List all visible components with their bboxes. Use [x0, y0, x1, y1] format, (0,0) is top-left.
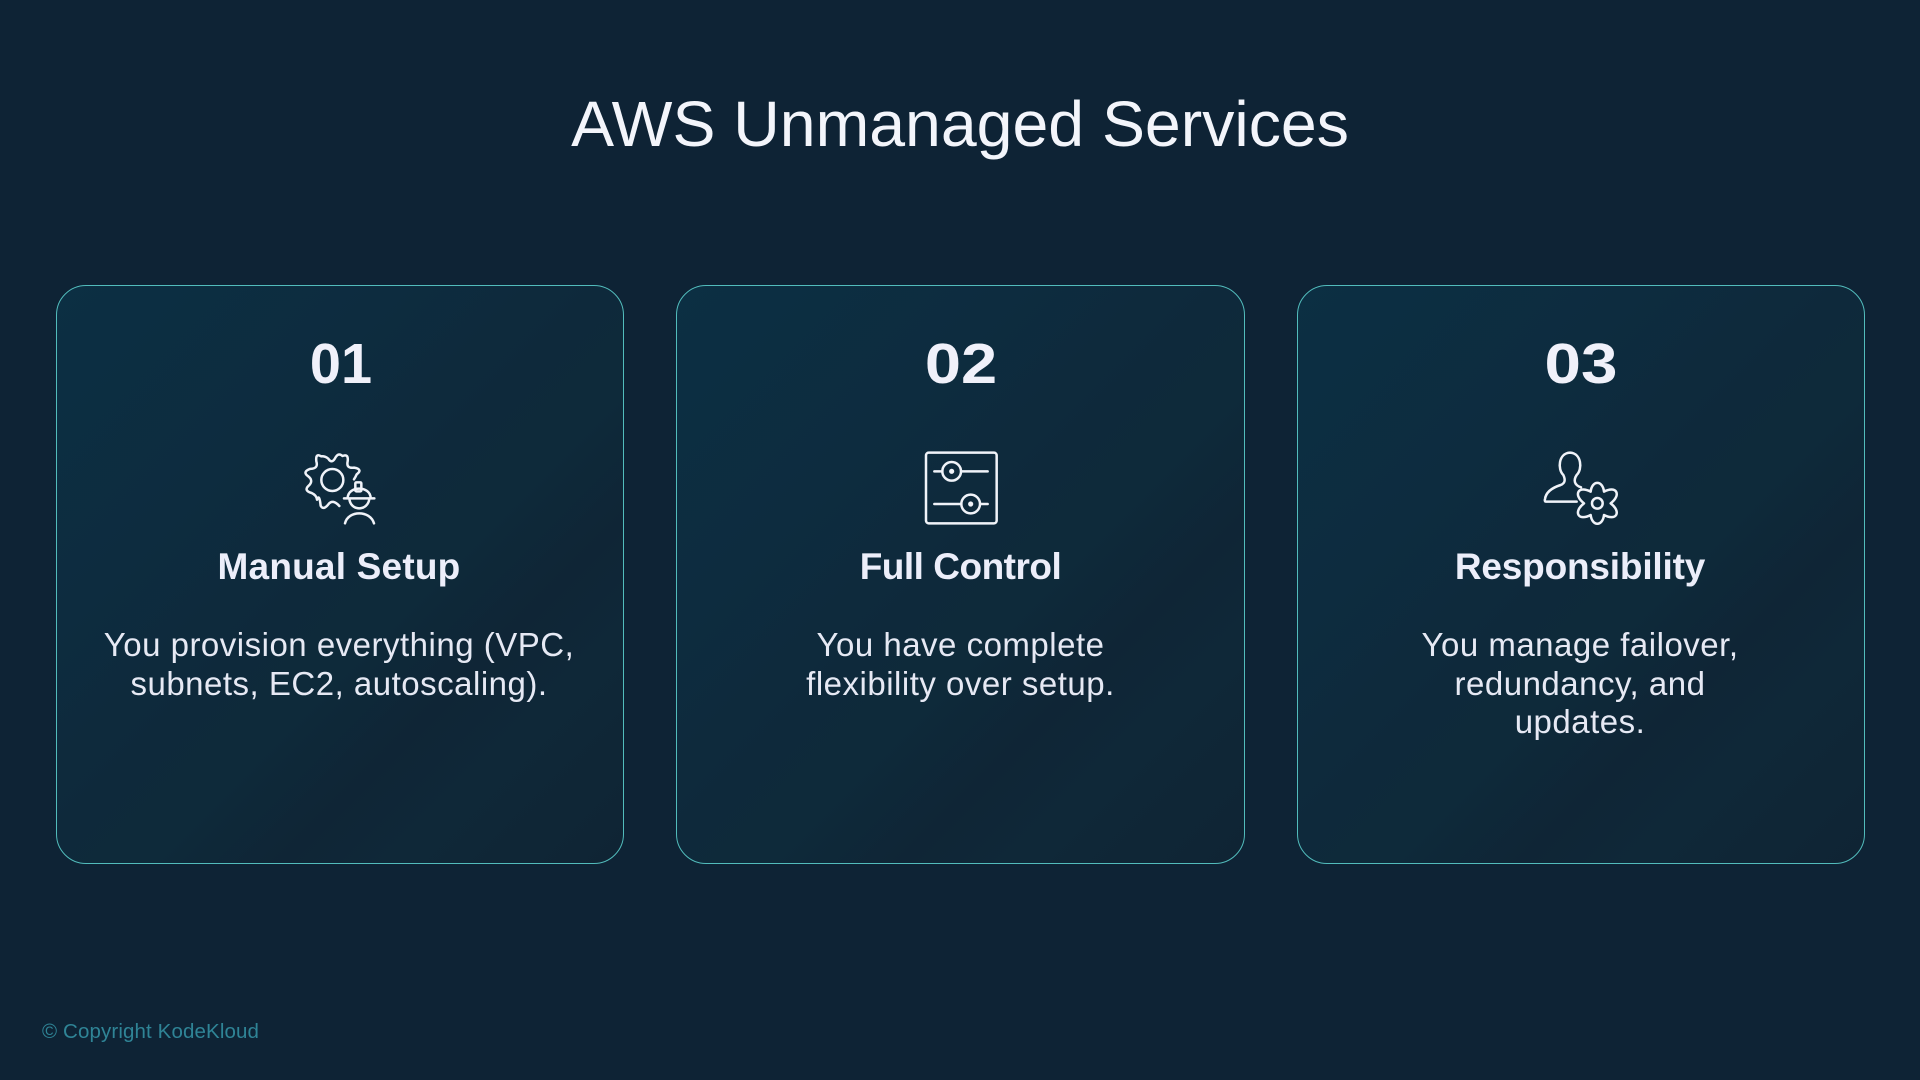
number 02: 02: [925, 332, 997, 396]
description: subnets, EC2, autoscaling).: [130, 664, 548, 702]
icon: sliders: [924, 451, 998, 525]
icon: person with gear: [1544, 451, 1618, 525]
panel: responsibility: [1297, 285, 1865, 864]
icon: gear with worker: [304, 453, 376, 525]
heading: Full Control: [860, 546, 1061, 587]
description: [806, 626, 1115, 702]
heading: Manual Setup: [218, 546, 460, 587]
description: You provision everything (VPC,: [104, 626, 574, 663]
heading: Responsibility: [1455, 546, 1705, 587]
description: redundancy, and: [1455, 664, 1705, 702]
description: [1421, 626, 1738, 740]
number 03: 03: [1545, 332, 1617, 396]
number 01: 01: [310, 332, 372, 396]
panel: full control: [676, 285, 1245, 864]
description: updates.: [1515, 703, 1645, 740]
description: You have complete: [816, 626, 1104, 663]
panel: manual setup: [56, 285, 624, 864]
description: You manage failover,: [1421, 626, 1738, 663]
title: AWS Unmanaged Services: [571, 88, 1349, 160]
description: flexibility over setup.: [806, 664, 1115, 702]
description: [104, 626, 574, 702]
footer copyright: © Copyright KodeKloud: [42, 1020, 259, 1043]
